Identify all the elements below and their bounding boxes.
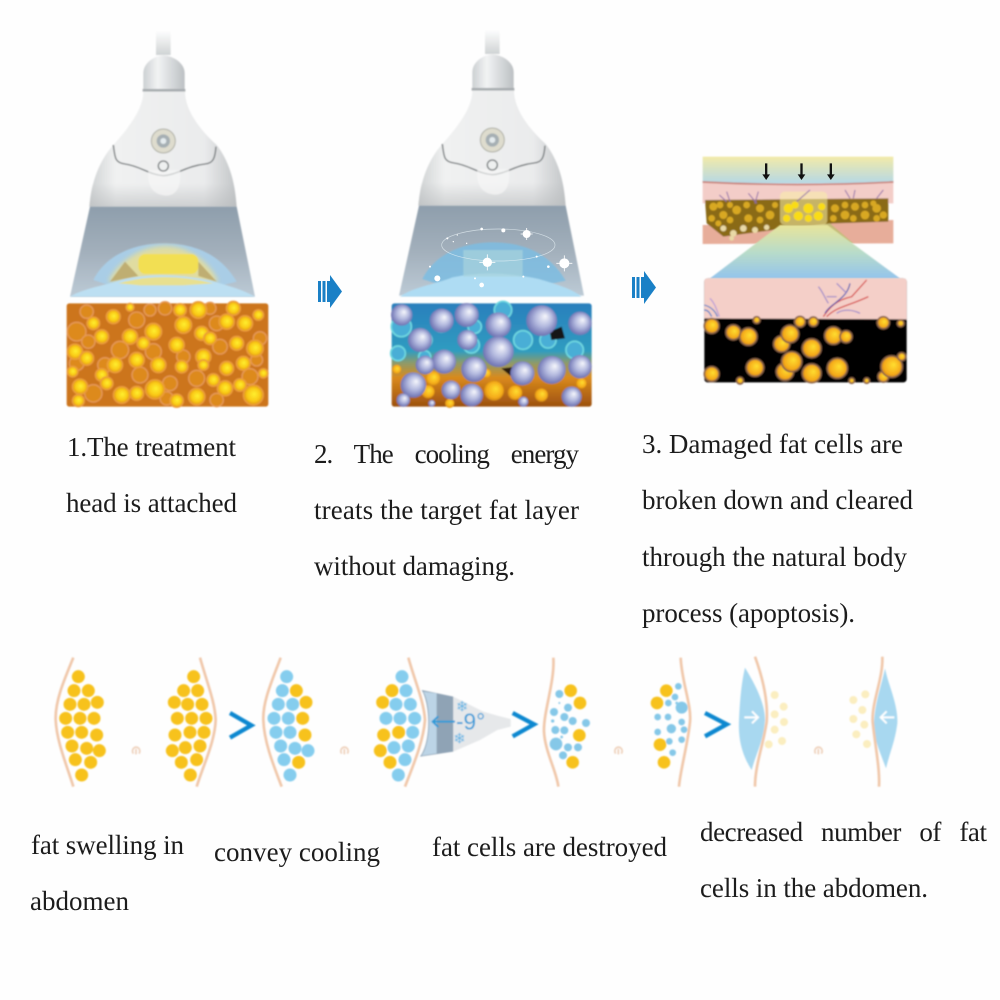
text: fat cells destroyed caption: fat cells are destroyed <box>432 832 668 862</box>
text: step 1 caption: head is attached <box>66 488 238 518</box>
zoom wedge <box>710 225 900 278</box>
diagram row: right half <box>513 657 897 787</box>
icon: applicator head <box>420 690 511 757</box>
text: step 2 caption: 2. The cooling energy <box>314 439 580 469</box>
diagram row: left half <box>56 658 511 787</box>
text: step 3 caption: through the natural body <box>642 542 908 572</box>
icon: connector mark <box>132 747 140 754</box>
text: step 3 caption <box>642 429 914 628</box>
text: step 3 caption: 3. Damaged fat cells are <box>642 429 903 459</box>
figure: swollen fat left <box>56 658 105 787</box>
icon: applicator head: ❄ <box>453 731 466 748</box>
figure: cooled fat with applicator <box>374 658 511 787</box>
close-up fat cells with vessels <box>704 278 907 384</box>
fat cell image <box>67 301 268 407</box>
figure: destroyed fat cells left <box>544 658 590 787</box>
arrow: greater-than <box>230 713 251 738</box>
frozen fat cell image <box>391 301 592 408</box>
text: step 2 caption: without damaging. <box>314 551 515 581</box>
text: step 1 caption <box>66 432 238 518</box>
arrow: step 2 to 3 <box>632 271 656 304</box>
icon: pressure arrows <box>762 163 835 180</box>
text: decreased fat cells caption: decreased number of fat <box>700 817 987 847</box>
icon: connector mark <box>341 747 348 754</box>
panel: step 3 skin cross-section <box>703 157 907 384</box>
icon: applicator head: ❄ <box>456 699 468 716</box>
text: decreased fat cells caption <box>700 817 987 903</box>
cooling energy glow and sparkles <box>400 228 582 297</box>
icon: treatment head <box>70 30 255 297</box>
arrow: greater-than <box>513 713 534 736</box>
text: step 2 caption: treats the target fat layer <box>314 495 579 525</box>
text: step 1 caption: 1.The treatment <box>67 432 236 462</box>
figure: partly cooled fat left <box>263 658 314 787</box>
text: step 3 caption: process (apoptosis). <box>642 598 855 628</box>
text: step 2 caption <box>314 439 580 581</box>
compressed tissue cross-section <box>703 157 893 244</box>
panel: step 2 cooling device on frozen fat <box>391 29 592 408</box>
figure: destroyed fat cells right <box>651 658 690 787</box>
text: step 3 caption: broken down and cleared <box>642 485 914 515</box>
figure: swollen fat right <box>166 658 216 787</box>
figure: reduced fat left <box>739 657 788 787</box>
icon: applicator head: -9° <box>456 709 485 735</box>
text: decreased fat cells caption: cells in the abdomen. <box>700 873 928 903</box>
text: fat swelling caption: fat swelling in <box>31 830 184 860</box>
icon: connector mark <box>615 747 622 754</box>
cooling dome with warm fat glow <box>70 243 255 297</box>
icon: treatment head <box>399 29 584 296</box>
panel: step 1 device on fat <box>67 30 268 407</box>
text: convey cooling caption: convey cooling <box>214 837 380 867</box>
arrow: greater-than <box>705 713 727 736</box>
text: fat swelling caption: abdomen <box>30 886 130 916</box>
arrow: step 1 to 2 <box>318 275 342 308</box>
text: fat swelling caption <box>30 830 184 916</box>
figure: reduced fat right <box>849 657 897 787</box>
icon: connector mark <box>815 747 822 754</box>
